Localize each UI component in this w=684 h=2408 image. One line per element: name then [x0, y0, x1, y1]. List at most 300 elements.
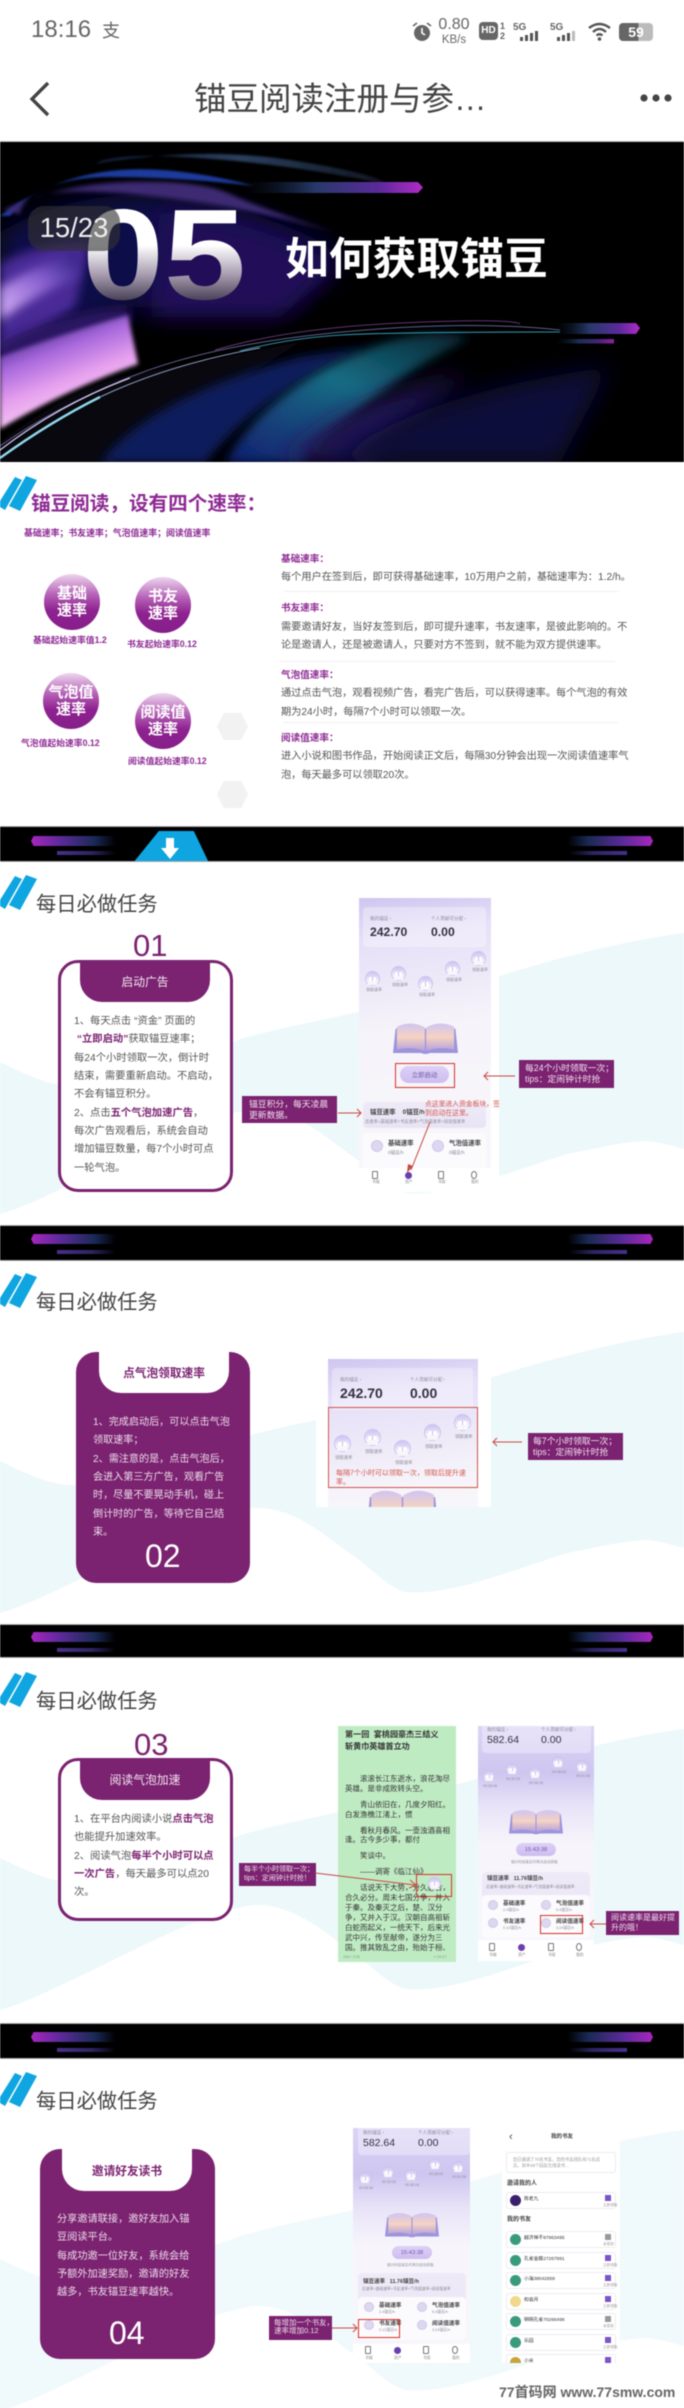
rate panel	[363, 1102, 486, 1128]
book illustration	[392, 1023, 458, 1054]
upper purple band	[3, 182, 340, 234]
white screenshot backing	[359, 898, 499, 1192]
balance value: 242.70	[370, 925, 407, 939]
inviter heading: 邀请我的人	[507, 2181, 537, 2187]
card text: 每24个小时领取一次，倒计时	[74, 1053, 209, 1064]
icon: down arrow	[160, 837, 180, 860]
phone screenshot: assets: 3.24锚豆/h	[432, 2328, 450, 2332]
phone screenshot: 个人贡献可分配 ›	[410, 1377, 445, 1382]
card tab title: 启动广告	[121, 974, 169, 988]
tab bar: 书架	[423, 2356, 431, 2360]
circle: base rate: 基础	[57, 585, 87, 602]
tab bar: 书城	[489, 1953, 497, 1957]
tab bar: 我的	[452, 2356, 460, 2360]
phone screenshot: 5.4锚豆/h	[556, 1908, 572, 1912]
hero title: 如何获取锚豆	[285, 235, 548, 284]
share value: 0.00	[418, 2137, 438, 2149]
arrow to reading rate	[588, 1919, 607, 1929]
share value: 0.00	[410, 1385, 437, 1401]
novel text: 国。推其致乱之由，殆始于桓、	[345, 1943, 450, 1952]
novel text: 青山依旧在，几度夕阳红。	[360, 1800, 450, 1809]
novel text: 争，又并入于汉。汉朝自高祖斩	[345, 1913, 450, 1922]
circle: bubble rate	[43, 673, 99, 729]
bubble group	[364, 950, 488, 997]
icon: blue slashes	[0, 874, 38, 910]
icon: blue slashes	[0, 1272, 38, 1308]
bubble rate title: 气泡值速率：	[281, 670, 339, 681]
phone screenshot	[359, 898, 491, 1187]
phone screenshot: 0锚豆/h	[449, 1150, 465, 1155]
phone screenshot: assets: 总速率=基础速率+书友速率+气泡值速率+阅读值速率	[362, 2287, 451, 2291]
friend rows: 未签到	[603, 2324, 614, 2328]
novel text: 看秋月春风。一壶浊酒喜相	[360, 1826, 450, 1835]
step number 03: 03	[134, 1727, 168, 1762]
text block: rate explanations	[280, 552, 631, 781]
lower streak	[556, 323, 640, 334]
tab bar	[353, 2344, 470, 2363]
page counter badge: 15/23	[40, 212, 108, 243]
tab bar: 资产	[518, 1953, 526, 1957]
arrow to rate panel	[337, 1108, 362, 1118]
callout: claim timing: 每7个小时领取一次；	[533, 1436, 617, 1446]
tab bar: 书城	[365, 2356, 373, 2360]
arrow to friend rate	[332, 2323, 359, 2333]
friend rate text	[280, 620, 628, 651]
phone screenshot: assets: 锚豆速率 11.76锚豆/h	[363, 2279, 419, 2285]
card text: 分享邀请联接，邀好友加入锚	[57, 2214, 189, 2225]
right streak	[567, 1234, 653, 1244]
phone screenshot: 基础速率	[503, 1901, 525, 1907]
phone screenshot: 总速率=基础速率+书友速率+气泡值速率+阅读值速率	[365, 1119, 465, 1124]
inviter row	[506, 2192, 616, 2209]
card text: 予额外加速奖励，邀请的好友	[57, 2269, 189, 2280]
circle: reading rate	[135, 693, 191, 749]
reading rate title: 阅读值速率：	[281, 733, 339, 744]
start button: 立即启动	[412, 1072, 437, 1079]
tab bar: 书架	[438, 1180, 446, 1184]
icon: 5G signal two: 5G	[550, 22, 564, 33]
red note: 率。	[336, 1479, 350, 1486]
bubble group	[358, 2162, 466, 2190]
sim index: 2	[500, 31, 505, 41]
rate cards	[482, 1895, 590, 1938]
panel: task 04 invite friends	[0, 2059, 684, 2408]
bubble group: 领取速率	[365, 1449, 383, 1454]
share value: 0.00	[431, 925, 455, 939]
lower small streak	[556, 339, 614, 344]
heading: 锚豆阅读，设有四个速率：	[31, 493, 266, 515]
novel reader screenshot	[338, 1726, 456, 1962]
top streak	[244, 182, 423, 193]
right streak	[567, 836, 653, 846]
phone screenshot: 书友速率	[503, 1919, 525, 1925]
inviter row: 立即领取	[603, 2203, 617, 2207]
card text	[74, 1812, 214, 1898]
callout: claim timing: tips：定闹钟计时抢	[533, 1447, 608, 1457]
callout: score update: 更新数据。	[249, 1110, 293, 1120]
phone screenshot: 基础速率	[388, 1140, 414, 1147]
phone screenshot: assets: 基础速率	[379, 2303, 401, 2309]
card text: 2、需注意的是，点击气泡后，	[93, 1454, 230, 1465]
bubble group: 领取速率	[425, 1444, 443, 1449]
callout: friend bonus: 每增加一个书友，	[274, 2318, 334, 2326]
chapter title: 斩黄巾英雄首立功	[345, 1742, 410, 1751]
red highlight	[358, 2319, 400, 2338]
callout: reading rate tip: 升的哦！	[611, 1922, 643, 1932]
info box: 员，其中48个园友在线读书…	[513, 2162, 569, 2168]
card text: 越多，书友锚豆速率越快。	[57, 2287, 179, 2298]
icon: 5G signal one	[512, 22, 539, 42]
card text: 会进入第三方广告，观看广告	[93, 1472, 224, 1483]
bubble group: 领取速率	[335, 1455, 353, 1460]
novel text: 话说天下大势，分久必合，	[360, 1883, 450, 1892]
balance card	[482, 1722, 591, 1753]
bubble group: 00:38:09	[552, 1770, 566, 1774]
icon: blue slashes	[0, 475, 38, 512]
chapter title	[344, 1729, 439, 1751]
card text: 豆阅读平台。	[57, 2232, 118, 2243]
red highlight	[395, 1063, 455, 1088]
phone screenshot: 2.4锚豆/h	[503, 1908, 519, 1912]
phone screenshot: assets: 我的锚豆 ›	[363, 2130, 384, 2135]
balance card	[358, 2124, 470, 2155]
card text: 一轮气泡。	[74, 1163, 125, 1174]
hexagon one	[217, 713, 248, 740]
share value: 0.00	[541, 1734, 561, 1746]
card notch title: 邀请好友读书	[92, 2164, 162, 2178]
card text: 每成功邀一位好友，系统会给	[57, 2251, 189, 2262]
pink sweep	[0, 315, 138, 429]
violet gap	[0, 307, 130, 370]
phone screenshot: 我的锚豆 ›	[340, 1377, 361, 1382]
arrow to bubbles	[492, 1437, 523, 1447]
icon: HD badge: HD	[481, 25, 496, 36]
reading rate text	[281, 750, 629, 781]
phone screenshot: 气泡值速率	[556, 1901, 584, 1907]
rate panel	[482, 1872, 590, 1938]
card text: 2、点击五个气泡加速广告，	[74, 1108, 203, 1119]
network speed: KB/s	[442, 34, 466, 46]
callout: friend bonus: 速率增加0.12	[274, 2326, 319, 2335]
novel text: 白蛇而起义，一统天下，后来光	[345, 1923, 450, 1932]
base rate title: 基础速率：	[281, 554, 329, 565]
balance card	[363, 907, 486, 947]
icon: back chevron	[29, 81, 50, 117]
scroll tab with down arrow	[133, 831, 209, 863]
upper slate arc	[95, 154, 385, 184]
sim index	[500, 21, 506, 41]
callout: half hour: 每半个小时领取一次；	[244, 1866, 314, 1872]
card notch title	[99, 1352, 229, 1393]
left streak	[31, 1632, 116, 1642]
icon: 5G signal one: 5G	[513, 22, 527, 33]
friend rows: 立即领取	[603, 2304, 617, 2308]
card notch title: 点气泡领取速率	[123, 1367, 205, 1380]
phone screenshot: 0.12锚豆/h	[503, 1926, 521, 1930]
phone screenshot: 我的锚豆 ›	[370, 916, 391, 921]
icon: blue slashes	[0, 2071, 38, 2108]
left streak	[31, 1234, 116, 1244]
callout: claim timing: 每24个小时领取一次；	[525, 1063, 614, 1073]
left streak	[31, 836, 116, 846]
back icon: ‹	[509, 2131, 513, 2143]
sim index: 1	[500, 21, 505, 31]
phone screenshot: 总速率=基础速率+书友速率+气泡值速率+阅读值速率	[486, 1885, 575, 1889]
card text: 倒计时的广告，等待它自己结	[93, 1509, 224, 1520]
watermark: 77首码网 www.77smw.com	[499, 2384, 675, 2400]
circle: friend rate: 速率	[148, 605, 178, 622]
info box	[506, 2152, 616, 2173]
novel text: ▪ 19:17	[434, 1954, 447, 1959]
page title: 锚豆阅读注册与参…	[194, 81, 487, 117]
novel text: 滚滚长江东逝水，浪花淘尽	[360, 1774, 450, 1783]
step number 01: 01	[133, 928, 167, 963]
phone screenshot: assets: 个人贡献可分配 ›	[418, 2130, 453, 2135]
reading rate text: 泡，每天最多可以领取20次。	[281, 770, 415, 781]
left streak	[31, 2032, 116, 2042]
balance value: 242.70	[340, 1385, 383, 1401]
friend rows: 孔雀金蝶27267891	[524, 2257, 565, 2262]
friend rows: 立即领取	[603, 2263, 617, 2267]
bubble group: 00:38:09	[429, 2172, 443, 2176]
rate cards	[363, 1133, 486, 1169]
circle: friend rate	[135, 577, 191, 633]
novel text	[343, 1774, 450, 1959]
card text: 也能提升加速效率。	[74, 1832, 167, 1843]
balance card	[332, 1368, 473, 1410]
callout: score update	[242, 1096, 337, 1123]
tab bar: 书架	[548, 1953, 556, 1957]
callout: claim timing	[519, 1060, 614, 1088]
clock: 18:16	[31, 16, 91, 43]
card text: 结束，需要重新启动。不启动，	[74, 1071, 218, 1082]
phone screenshot: 个人贡献可分配 ›	[431, 916, 466, 921]
phone screenshot: 0锚豆/h	[388, 1150, 404, 1155]
red highlight	[328, 1407, 478, 1488]
tab bar	[359, 1168, 491, 1187]
card: bubble claim	[76, 1352, 250, 1583]
bubble rate text: 期为24小时，每隔7个小时可以领取一次。	[281, 707, 471, 718]
phone screenshot: friends list	[502, 2128, 620, 2363]
swoosh artwork	[0, 152, 640, 462]
novel text: 合久必分。周末七国分争，并入	[345, 1893, 450, 1902]
phone screenshot: 倒计时结束后可再次启动获取	[511, 1860, 558, 1864]
bubble group: 领取速率	[366, 987, 382, 992]
icon: wifi	[588, 22, 612, 42]
bubble rate text: 通过点击气泡，观看视频广告，看完广告后，可以获得速率。每个气泡的有效	[281, 688, 627, 699]
card text: 1、完成启动后，可以点击气泡	[93, 1417, 230, 1428]
callout: score update: 锚豆积分，每天凌晨	[249, 1099, 328, 1109]
callout: half hour	[239, 1863, 316, 1886]
friend rows: 未签到	[603, 2242, 614, 2246]
info box: 您已邀请了70名书友，您的书友团队有71名成	[513, 2157, 600, 2162]
callout: claim timing	[528, 1433, 623, 1460]
hexagon two	[217, 781, 248, 808]
circle: reading rate: 阅读值	[140, 704, 186, 721]
card text	[92, 1416, 230, 1538]
bubble group	[334, 1414, 473, 1465]
phone screenshot: 阅读值速率	[556, 1919, 584, 1925]
card tab title	[80, 960, 210, 1002]
heading: 每日必做任务	[36, 894, 158, 916]
tab bar	[478, 1940, 594, 1961]
tab bar: 我的	[576, 1953, 584, 1957]
novel text: 逢。古今多少事，都付	[345, 1835, 420, 1844]
balance value: 582.64	[487, 1734, 519, 1746]
tab bar: 资产	[405, 1180, 413, 1184]
phone screenshot	[328, 1359, 478, 1507]
panel: task 03 reading bubbles	[0, 1658, 684, 2023]
heading: 每日必做任务	[36, 2091, 158, 2113]
red note: 每隔7个小时可以领取一次，领取后提升速	[336, 1470, 466, 1477]
white screenshot backing	[316, 1359, 491, 1507]
phone screenshot: 我的锚豆 ›	[487, 1727, 508, 1732]
divider bar two	[0, 1225, 684, 1261]
bubble group: 00:32:05	[382, 2180, 396, 2184]
screen title: 我的书友	[551, 2134, 573, 2140]
card text: 增加锚豆数量，每7个小时可点	[74, 1144, 214, 1155]
tab bar: 我的	[471, 1180, 479, 1184]
friend rows: 乐园	[524, 2339, 534, 2344]
panel: task 02 bubbles	[0, 1261, 684, 1624]
heading: 每日必做任务	[36, 1292, 158, 1314]
step number 04: 04	[109, 2315, 145, 2351]
card text: 次。	[74, 1887, 95, 1898]
network speed	[438, 16, 470, 46]
circle: friend rate: 书友	[148, 588, 178, 605]
hero banner	[0, 141, 684, 463]
phone screenshot: 锚豆速率 11.76锚豆/h	[487, 1876, 543, 1882]
rate cards	[358, 2297, 466, 2340]
label: reading rate: 阅读值起始速率0.12	[128, 756, 207, 766]
input method glyph: 支	[102, 21, 120, 41]
friends heading: 我的书友	[507, 2217, 531, 2223]
bubble group: 领取速率	[472, 967, 488, 972]
card text: 领取速率；	[93, 1435, 143, 1446]
icon: alarm	[412, 22, 432, 42]
card tab title: 阅读气泡加速	[110, 1772, 180, 1786]
big section number: 05	[82, 183, 246, 327]
circle: reading rate: 速率	[148, 721, 178, 738]
circle: base rate	[44, 574, 100, 630]
red note	[425, 1100, 500, 1117]
bubble group	[482, 1760, 590, 1788]
card text: 一次广告，每天最多可以点20	[74, 1869, 209, 1880]
circle: bubble rate: 气泡值	[48, 684, 94, 701]
teal curve	[225, 334, 470, 463]
inviter row: 陈老九	[524, 2197, 538, 2202]
novel text: 笑谈中。	[360, 1851, 390, 1860]
countdown pill: 15:43:38	[401, 2250, 423, 2256]
bubble rate text	[280, 686, 628, 718]
bubble group: 00:28:48	[483, 1784, 497, 1788]
card text: 1、每天点击 “资金” 页面的	[74, 1016, 195, 1027]
lower navy curve	[100, 347, 370, 463]
novel text: 白发渔樵江渚上，惯	[345, 1810, 412, 1819]
upper blue band	[0, 169, 255, 216]
label: friend rate: 书友起始速率0.12	[127, 639, 197, 649]
arrow to start button	[482, 1071, 516, 1081]
reading rate text: 进入小说和图书作品，开始阅读正文后，每隔30分钟会出现一次阅读值速率气	[281, 751, 629, 762]
countdown pill: 15:43:38	[525, 1846, 547, 1852]
icon: more dots	[640, 94, 672, 102]
novel text: ——调寄《临江仙》	[360, 1867, 428, 1876]
card: invite friends	[40, 2149, 215, 2359]
friend rate text: 论是邀请人，还是被邀请人，只要对方不签到，就不能为双方提供速率。	[281, 640, 607, 651]
card: reading bubbles	[58, 1758, 233, 1921]
phone screenshot: assets: 2.4锚豆/h	[379, 2310, 395, 2314]
panel: task 01 start ad	[0, 862, 684, 1225]
card notch title	[62, 2149, 192, 2191]
friend rows: 立即领取	[603, 2345, 617, 2349]
bubble group: 领取速率	[392, 982, 408, 987]
bubble group: 00:32:05	[506, 1777, 520, 1781]
red note: 到启动在这里。	[425, 1110, 473, 1117]
bubble group: 00:51:58	[576, 1774, 590, 1778]
right streak	[567, 1632, 653, 1642]
label: bubble rate: 气泡值起始速率0.12	[21, 738, 100, 748]
friend rows: 越济禅不97963495	[524, 2236, 565, 2241]
callout: claim timing: tips：定闹钟计时抢	[525, 1074, 600, 1084]
deep navy and violet behind number	[0, 195, 340, 357]
card text: 时，尽量不要晃动手机，碰上	[93, 1490, 224, 1501]
circle: base rate: 速率	[57, 602, 87, 619]
phone screenshot: assets: 阅读值速率	[432, 2321, 460, 2327]
novel text: 于秦。及秦灭之后，楚、汉分	[345, 1903, 442, 1912]
icon: HD badge	[479, 22, 498, 40]
friend rows: 立即领取	[603, 2283, 617, 2287]
card text: “立即启动”获取锚豆速率；	[77, 1034, 200, 1045]
callout: reading rate tip: 阅读速率是最好提	[611, 1913, 675, 1922]
book illustration	[384, 2212, 440, 2238]
right streak	[567, 2032, 653, 2042]
label: base rate: 基础起始速率值1.2	[33, 635, 107, 645]
countdown pill	[392, 2246, 432, 2259]
rate panel	[358, 2273, 466, 2340]
circle: bubble rate: 速率	[56, 701, 86, 718]
book illustration	[368, 1490, 437, 1508]
lavender sweep glow	[0, 242, 90, 357]
bubble group: 00:36:18	[405, 2183, 419, 2187]
phone screenshot: 3.24锚豆/h	[556, 1926, 574, 1930]
bubble group: 00:51:58	[452, 2175, 466, 2179]
icon: blue slashes	[0, 1671, 38, 1708]
novel text: 武中兴，传至献帝，遂分为三	[345, 1933, 442, 1942]
lavender sweep	[0, 254, 78, 320]
friend rows: 明明孔雀70266498	[524, 2318, 565, 2323]
bubble group: 00:36:18	[529, 1781, 543, 1785]
friend rate text: 需要邀请好友，当好友签到后，即可提升速率，书友速率，是彼此影响的。不	[281, 622, 627, 633]
countdown pill	[516, 1843, 556, 1856]
callout: half hour: tips：定闹钟计时抢！	[244, 1875, 311, 1882]
fine arc lines	[0, 321, 560, 458]
friend rows: 小海38042959	[524, 2277, 555, 2282]
card text	[74, 1014, 218, 1174]
phone screenshot: assets: 0.12锚豆/h	[379, 2328, 397, 2332]
page counter badge	[28, 206, 120, 251]
phone screenshot: 个人贡献可分配 ›	[541, 1727, 576, 1732]
phone screenshot: assets	[353, 2128, 470, 2363]
friend rows	[502, 2228, 620, 2363]
tab bar: 资产	[394, 2356, 402, 2360]
phone screenshot: 气泡值速率	[449, 1140, 481, 1147]
icon: 5G signal two	[550, 22, 576, 42]
red highlight	[540, 1915, 583, 1934]
friend rate title: 书友速率：	[281, 603, 329, 614]
card text: 1、在平台内阅读小说点击气泡	[74, 1814, 214, 1825]
novel text: 英雄。是非成败转头空。	[345, 1784, 428, 1793]
divider bar four	[0, 2023, 684, 2059]
